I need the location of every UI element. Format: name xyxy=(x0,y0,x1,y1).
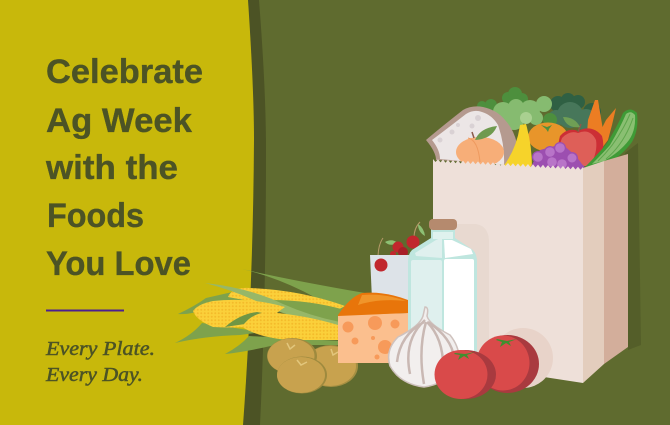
cherries xyxy=(378,222,425,258)
produce in bag xyxy=(426,87,637,174)
title: Celebrate xyxy=(46,53,203,91)
icon: peach xyxy=(456,126,504,167)
cherry on sack xyxy=(374,258,388,272)
icon: carrots xyxy=(587,100,616,148)
title: Foods xyxy=(47,197,144,235)
husk mass xyxy=(270,300,345,326)
icon: orange xyxy=(528,122,568,152)
icon: bread xyxy=(426,106,518,165)
shadows on bag xyxy=(433,224,489,375)
husk leaf middle xyxy=(205,283,340,326)
yellow panel xyxy=(0,0,254,425)
title: Ag Week xyxy=(46,102,192,140)
potatoes xyxy=(267,338,358,394)
ear: back xyxy=(228,288,345,314)
ear: left xyxy=(193,300,285,328)
cheese xyxy=(338,293,408,363)
husk leaves back xyxy=(175,269,365,354)
dark band xyxy=(240,0,266,425)
bag shadow on background xyxy=(625,143,641,350)
tagline: Every Day. xyxy=(45,364,143,386)
icon: lettuce xyxy=(477,87,557,130)
tomato right xyxy=(476,335,539,393)
icon: apple xyxy=(558,117,603,168)
potato right xyxy=(304,345,358,387)
ear: front xyxy=(242,312,338,340)
bag front xyxy=(433,159,583,383)
garlic xyxy=(389,307,459,387)
cherry bag xyxy=(370,222,425,300)
potato front xyxy=(277,356,327,394)
bottle cap xyxy=(429,219,457,230)
icon: banana xyxy=(503,124,532,168)
title: You Love xyxy=(46,245,191,283)
tagline xyxy=(45,338,155,386)
corn xyxy=(175,269,365,354)
bag side panel xyxy=(583,161,604,383)
title xyxy=(45,53,203,283)
husk leaf small xyxy=(225,312,268,327)
tagline: Every Plate. xyxy=(45,338,155,360)
divider rule xyxy=(46,310,124,312)
title: with the xyxy=(45,149,178,187)
icon: cucumber xyxy=(585,110,637,167)
icon: grapes xyxy=(529,142,587,174)
potato left xyxy=(267,338,317,374)
tomato left xyxy=(434,350,496,399)
paper sack xyxy=(370,255,412,300)
icon: kale xyxy=(548,93,601,131)
milk bottle xyxy=(408,219,477,361)
paper bag xyxy=(433,154,628,388)
